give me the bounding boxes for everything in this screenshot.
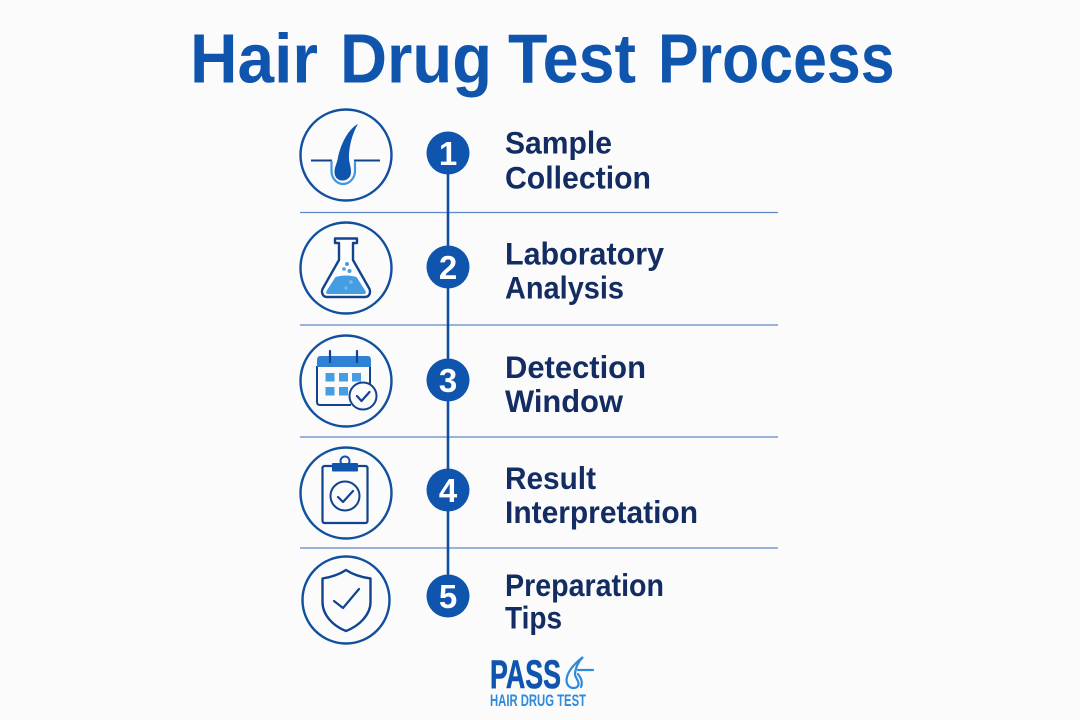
label: laboratory analysis: Analysis	[505, 270, 624, 306]
number badge 4: 4	[439, 472, 458, 509]
logo wordmark: PASS	[490, 653, 561, 697]
title: Test	[508, 20, 636, 98]
title: Hair	[190, 20, 318, 98]
step 2: laboratory analysis	[300, 222, 664, 314]
label: detection window: Detection	[505, 349, 646, 385]
number badge 3	[426, 358, 470, 402]
timeline connector	[447, 155, 449, 596]
label: result interpretation: Result	[505, 460, 596, 496]
number badge 3: 3	[439, 362, 457, 399]
title: Process	[658, 20, 894, 98]
icon: calendar with check	[300, 336, 392, 426]
step 4: result interpretation	[300, 448, 698, 538]
icon: shield with check	[302, 556, 390, 644]
label: preparation tips: Preparation	[505, 567, 664, 603]
label: sample collection: Collection	[505, 160, 651, 196]
number badge 1: 1	[439, 135, 457, 172]
label: detection window: Window	[505, 383, 623, 419]
step 3: detection window	[300, 336, 646, 426]
label: preparation tips: Tips	[505, 600, 562, 636]
number badge 2	[426, 246, 470, 288]
icon: hair follicle	[300, 110, 392, 200]
label: sample collection: Sample	[505, 124, 612, 160]
number badge 1	[426, 132, 470, 174]
number badge 5: 5	[439, 578, 457, 615]
number badge 5	[426, 574, 470, 618]
row dividers	[300, 212, 778, 548]
logo tagline: HAIR DRUG TEST	[490, 692, 586, 710]
logo icon: hair drop	[566, 657, 593, 688]
title: Drug	[340, 20, 492, 98]
label: laboratory analysis: Laboratory	[505, 236, 664, 272]
step 1: sample collection	[300, 110, 651, 200]
number badge 2: 2	[439, 249, 457, 286]
number badge 4	[426, 468, 470, 512]
icon: clipboard with check	[300, 448, 392, 538]
label: result interpretation: Interpretation	[505, 494, 698, 530]
step 5: preparation tips	[302, 556, 664, 644]
logo: pass hair drug test	[490, 653, 593, 710]
icon: flask	[300, 222, 392, 314]
